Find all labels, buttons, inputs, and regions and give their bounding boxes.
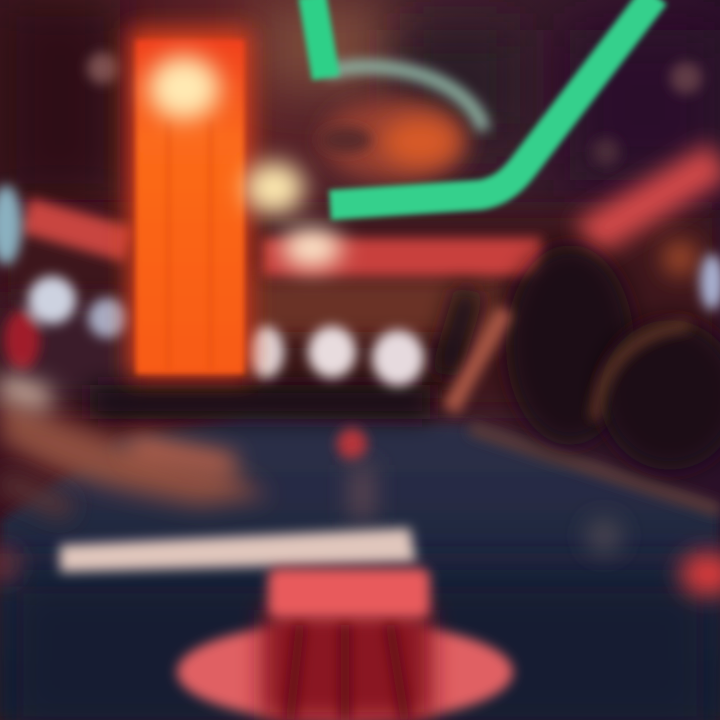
white strip label [60,528,416,572]
dark band under tower [90,385,430,419]
small table chips [0,518,720,596]
dark silhouettes right [506,245,720,470]
roulette ring [319,67,484,182]
orange tower [128,28,252,378]
tower glow [148,56,220,120]
left white orbs [0,185,720,370]
hand on left [0,385,270,510]
dark silhouette centre [445,290,470,375]
crowd and lower wall band [0,210,720,410]
small marker on table [337,428,374,520]
orange dots right [662,240,698,276]
white chips row [248,326,424,386]
red band right [585,160,720,240]
table surface [0,415,720,720]
green neon stripes [312,0,655,205]
red horizontal band left [25,215,130,245]
warm lights [244,162,342,268]
chip stack [177,568,513,720]
red horizontal band centre [262,238,542,276]
arm of seated figure [450,310,505,410]
